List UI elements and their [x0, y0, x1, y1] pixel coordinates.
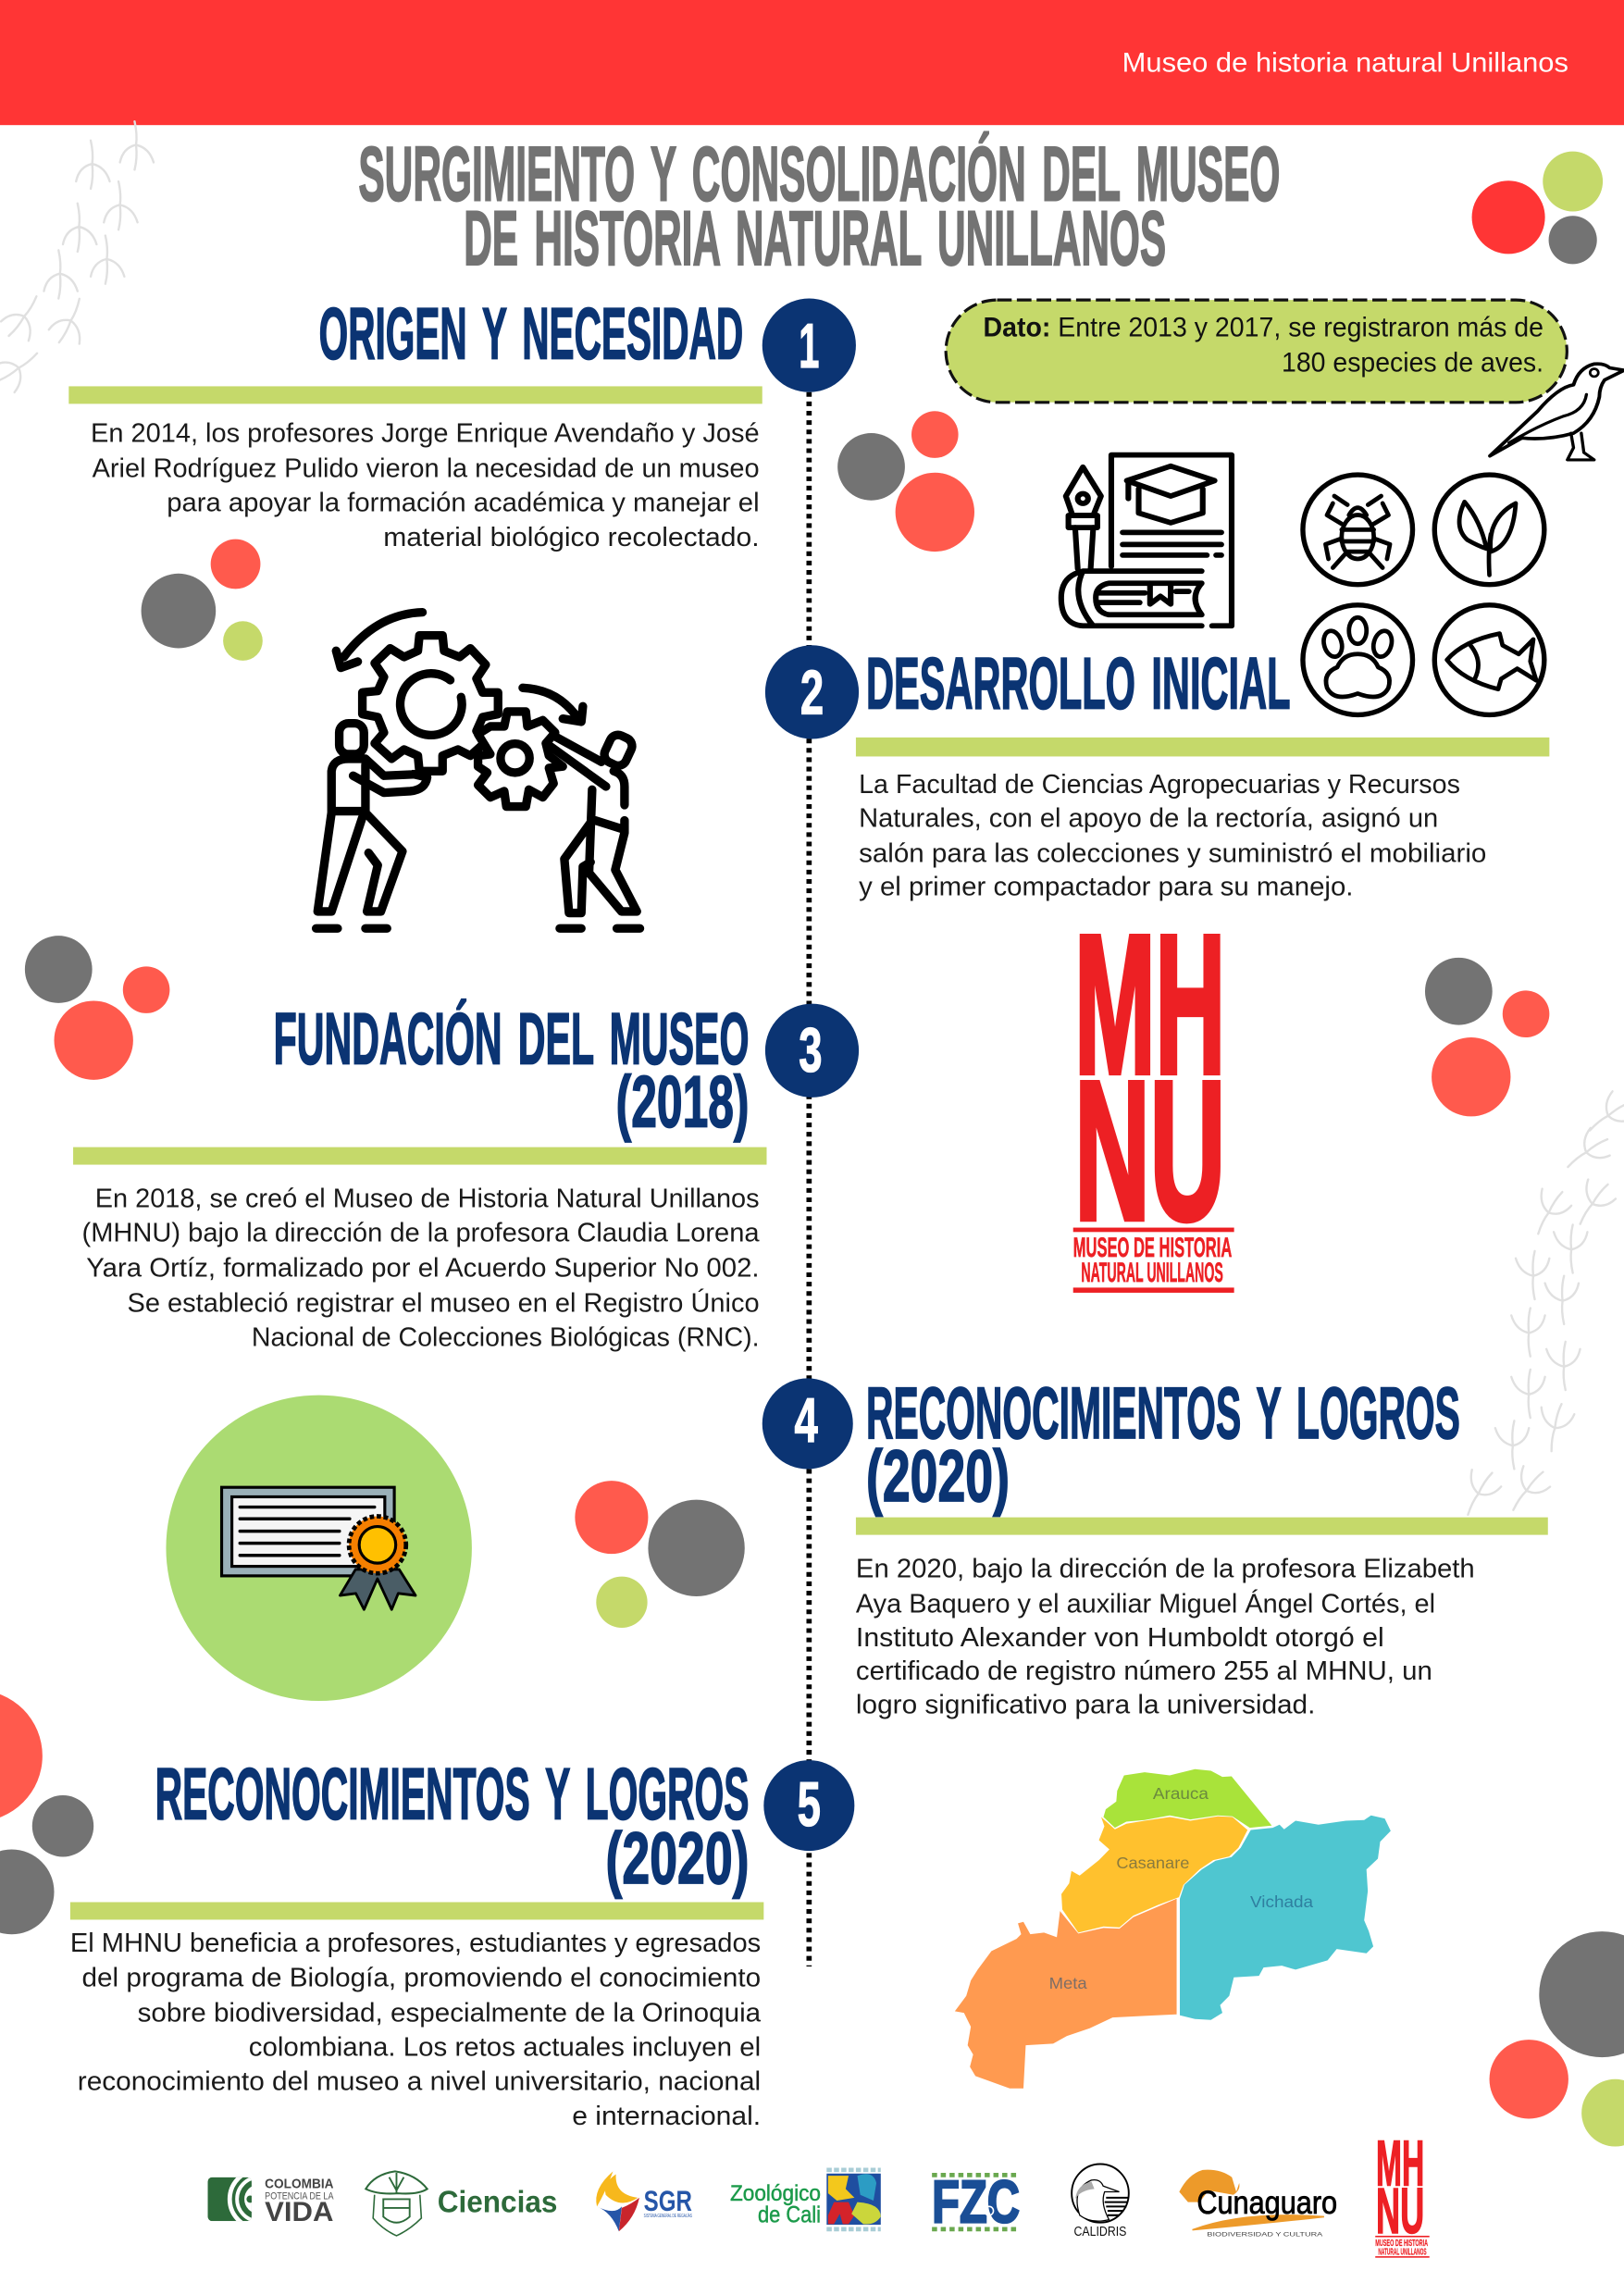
section 4 text [856, 1554, 1475, 1720]
section 4 text: certificado de registro número 255 al MHNU, un [856, 1656, 1432, 1686]
dato callout: Dato: Entre 2013 y 2017, se registraron más de [983, 314, 1543, 343]
logo: Zoológico de Cali: Zoológico [730, 2182, 821, 2206]
section 5 rule [70, 1902, 763, 1919]
section 4 heading [866, 1371, 1460, 1517]
icon: plant badge [1434, 475, 1544, 585]
icon: bird [1490, 364, 1624, 460]
section 4 text: En 2020, bajo la dirección de la profesora Elizabeth [856, 1554, 1475, 1583]
MHNU logo [1073, 895, 1234, 1293]
header band [0, 0, 1624, 125]
section 5 heading [155, 1752, 750, 1899]
MHNU logo: MUSEO DE HISTORIA [1073, 1233, 1232, 1263]
logo: MHNU small: NU [1376, 2175, 1424, 2247]
section 3 rule [73, 1148, 766, 1165]
dato callout: 180 especies de aves. [1282, 349, 1543, 378]
section 2 rule [856, 738, 1549, 756]
decorative circles: right middle [1425, 958, 1549, 1116]
logo: MHNU small [1375, 2127, 1430, 2258]
section 5 heading: RECONOCIMIENTOS Y LOGROS [155, 1752, 750, 1834]
section 5 text: del programa de Biología, promoviendo el conocimiento [82, 1963, 761, 1992]
logo: Calidris [1072, 2164, 1129, 2239]
section 5 badge [763, 1760, 854, 1851]
logo: Colombia potencia de la vida: VIDA [265, 2197, 333, 2227]
section 5 text: sobre biodiversidad, especialmente de la Orinoquia [138, 1998, 761, 2028]
logo: Zoológico de Cali [730, 2170, 881, 2229]
section 4 badge: 4 [795, 1385, 818, 1456]
main title [358, 130, 1280, 281]
logo: SGR [596, 2171, 692, 2231]
logo: Colombia potencia de la vida: POTENCIA DE LA [265, 2190, 334, 2202]
footprints: top left [0, 121, 154, 396]
section 4 badge [762, 1378, 853, 1469]
logo: Colombia potencia de la vida [207, 2177, 333, 2221]
section 2 text [859, 770, 1486, 902]
logo: MHNU small: MUSEO DE HISTORIA [1375, 2239, 1428, 2249]
icon: bug badge [1303, 475, 1413, 585]
section 1 heading: ORIGEN Y NECESIDAD [319, 292, 743, 374]
decorative circles: left middle [25, 936, 169, 1080]
map of the Orinoquia: Arauca [1153, 1784, 1209, 1803]
icon: academic book [1061, 455, 1232, 626]
section 2 text: Naturales, con el apoyo de la rectoría, asignó un [859, 803, 1438, 833]
section 1 text: Ariel Rodríguez Pulido vieron la necesidad de un museo [93, 453, 760, 483]
section 1 text: para apoyar la formación académica y manejar el [167, 489, 760, 518]
map of the Orinoquia [955, 1769, 1391, 2089]
section 3 text: Yara Ortíz, formalizado por el Acuerdo Superior No 002. [86, 1254, 760, 1284]
logo: SGR: SISTEMA GENERAL DE REGALÍAS [644, 2213, 692, 2219]
section 5 heading: (2020) [606, 1817, 750, 1899]
logo: Colombia potencia de la vida: COLOMBIA [265, 2177, 334, 2192]
section 1 rule [68, 386, 762, 403]
icon: paw badge [1303, 605, 1413, 714]
section 3 heading [274, 997, 750, 1142]
logo: MHNU small: MH [1376, 2127, 1424, 2199]
icon: people turning gears [316, 613, 640, 928]
logo: Cunaguaro: Cunaguaro [1196, 2186, 1337, 2221]
section 4 rule [856, 1518, 1548, 1535]
section 5 badge: 5 [798, 1769, 821, 1840]
dato callout [946, 300, 1567, 403]
footprints: right side [1452, 1087, 1624, 1522]
header band: Museo de historia natural Unillanos [1122, 47, 1568, 78]
section 1 text [91, 419, 760, 552]
number badge 1 [762, 299, 856, 392]
section 3 badge: 3 [799, 1014, 823, 1085]
section 2 text: y el primer compactador para su manejo. [859, 873, 1354, 902]
section 3 text: Nacional de Colecciones Biológicas (RNC). [252, 1323, 760, 1353]
section 2 badge: 2 [800, 658, 824, 728]
section 3 heading: FUNDACIÓN DEL MUSEO [274, 997, 750, 1079]
section 2 badge [765, 645, 859, 738]
decorative circles: top right [1472, 152, 1603, 264]
timeline dotted line [808, 392, 811, 1966]
section 5 text: colombiana. Los retos actuales incluyen el [249, 2032, 761, 2062]
map of the Orinoquia: Casanare [1116, 1854, 1189, 1872]
decorative circles: left edge [0, 1690, 93, 1934]
MHNU logo: NU [1074, 1041, 1225, 1261]
section 4 text: Instituto Alexander von Humboldt otorgó el [856, 1623, 1384, 1653]
logo: Cunaguaro [1179, 2170, 1337, 2239]
logo: Ministerio de Ciencias [366, 2171, 557, 2236]
section 3 text [82, 1184, 760, 1353]
decorative circles: upper centre [837, 411, 974, 552]
number badge 1: 1 [799, 311, 819, 381]
section 1 text: En 2014, los profesores Jorge Enrique Avendaño y José [91, 419, 760, 449]
logo: Zoológico de Cali: de Cali [758, 2202, 821, 2228]
decorative circles: left upper [142, 540, 263, 661]
map of the Orinoquia: Meta [1049, 1974, 1087, 1992]
certificate icon [166, 1396, 472, 1701]
section 3 text: En 2018, se creó el Museo de Historia Natural Unillanos [95, 1184, 760, 1213]
logo: Cunaguaro: BIODIVERSIDAD Y CULTURA [1207, 2232, 1323, 2239]
logo: FZC: FZC [932, 2168, 1020, 2236]
logo: Calidris: CALIDRIS [1074, 2224, 1126, 2239]
section 3 badge [765, 1004, 859, 1098]
section 4 text: Aya Baquero y el auxiliar Miguel Ángel Cortés, el [856, 1589, 1435, 1619]
section 3 text: Se estableció registrar el museo en el Registro Único [128, 1288, 760, 1318]
decorative circles: beside certificate [575, 1481, 745, 1628]
section 2 text: La Facultad de Ciencias Agropecuarias y Recursos [859, 770, 1460, 800]
MHNU logo: MH [1074, 895, 1225, 1115]
section 5 text: reconocimiento del museo a nivel universitario, nacional [78, 2067, 761, 2097]
decorative circles: bottom right [1490, 1931, 1624, 2147]
logo: SGR: SGR [644, 2184, 692, 2217]
icon: fish badge [1434, 605, 1544, 714]
logo: MHNU small: NATURAL UNILLANOS [1378, 2248, 1427, 2258]
section 5 text: El MHNU beneficia a profesores, estudiantes y egresados [70, 1929, 761, 1958]
section 2 text: salón para las colecciones y suministró el mobiliario [859, 838, 1486, 868]
section 4 heading: (2020) [866, 1434, 1010, 1517]
section 5 text [70, 1929, 761, 2131]
section 5 text: e internacional. [572, 2102, 761, 2131]
section 3 heading: (2018) [616, 1060, 750, 1142]
map of the Orinoquia: Vichada [1250, 1892, 1313, 1911]
section 4 text: logro significativo para la universidad. [856, 1691, 1315, 1720]
section 3 text: (MHNU) bajo la dirección de la profesora Claudia Lorena [82, 1219, 760, 1248]
section 1 text: material biológico recolectado. [383, 523, 760, 552]
logo: Ministerio de Ciencias: Ciencias [438, 2186, 557, 2220]
MHNU logo: NATURAL UNILLANOS [1081, 1258, 1223, 1288]
